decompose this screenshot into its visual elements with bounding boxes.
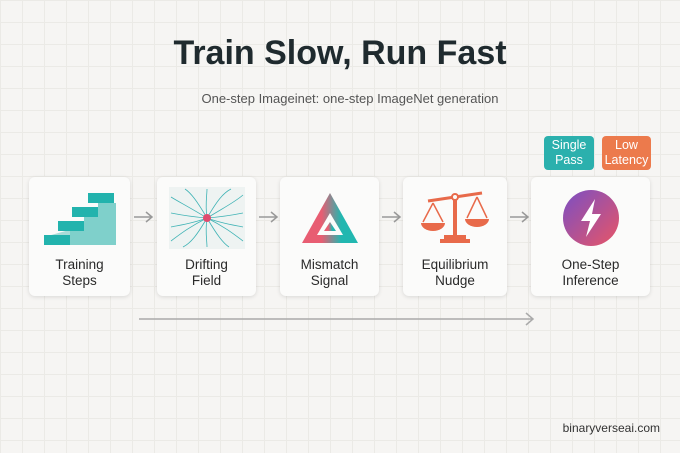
long arrow xyxy=(139,312,534,326)
subtitle: One-step Imageinet: one-step ImageNet generation xyxy=(201,91,498,106)
icon: stairs xyxy=(44,193,116,245)
card: equilibrium nudge: Nudge xyxy=(435,273,475,288)
card: equilibrium nudge: Equilibrium xyxy=(422,257,488,272)
title: Train Slow, Run Fast xyxy=(173,34,507,72)
card: equilibrium nudge xyxy=(403,177,507,296)
badge: low latency xyxy=(602,136,651,170)
card: one-step inference: Inference xyxy=(562,273,619,288)
badge: single pass xyxy=(544,136,594,170)
card: training steps xyxy=(29,177,130,296)
card: one-step inference: One-Step xyxy=(562,257,619,272)
badge: single pass: Pass xyxy=(555,153,583,167)
footer credit: binaryverseai.com xyxy=(563,421,660,435)
arrow 2 xyxy=(259,212,278,222)
arrow 4 xyxy=(510,212,529,222)
card: drifting field: Drifting xyxy=(185,257,228,272)
card: drifting field: Field xyxy=(192,273,221,288)
card: training steps: Training xyxy=(55,257,104,272)
arrow 1 xyxy=(134,212,153,222)
card: mismatch signal: Signal xyxy=(311,273,348,288)
card: one-step inference xyxy=(531,177,650,296)
icon: lightning xyxy=(563,190,619,246)
card: drifting field xyxy=(157,177,256,296)
badge: low latency: Low xyxy=(615,138,638,152)
arrow 3 xyxy=(382,212,401,222)
card: mismatch signal xyxy=(280,177,379,296)
card: training steps: Steps xyxy=(62,273,97,288)
badge: single pass: Single xyxy=(552,138,586,152)
badge: low latency: Latency xyxy=(605,153,648,167)
icon: field xyxy=(169,187,245,249)
icon: scales xyxy=(421,192,489,243)
icon: triangle xyxy=(302,193,358,243)
card: mismatch signal: Mismatch xyxy=(301,257,358,272)
